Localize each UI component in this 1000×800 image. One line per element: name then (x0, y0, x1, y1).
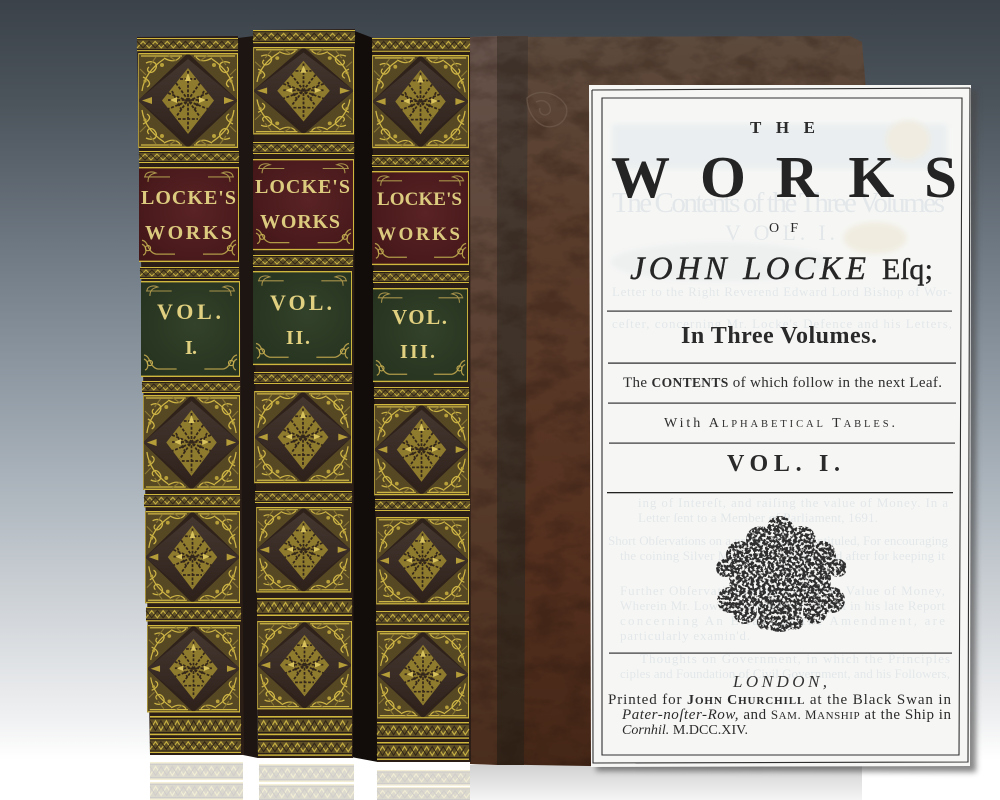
rule (608, 362, 956, 364)
text: In Three Volumes: In Three Volumes. (681, 323, 877, 349)
spine shadows between volumes (238, 30, 378, 762)
upper ornamental panel (138, 53, 238, 148)
green volume label: II. (286, 327, 310, 349)
volume three back cover (470, 36, 866, 766)
page: show-through text from reverse: Thoughts on Government, in which the Principles (640, 651, 950, 666)
page: paper (589, 85, 971, 767)
page: show-through text from reverse: Further Obſervations concerning the Value of Money, (620, 583, 945, 598)
green volume label: VOL. (392, 305, 447, 329)
text: London: LONDON, (732, 672, 827, 691)
cover: dark groove (497, 36, 528, 765)
red title label (372, 171, 469, 265)
text: VOL. I.: VOL. I. (727, 451, 840, 477)
bottom bands (377, 722, 469, 739)
green volume label (373, 288, 468, 382)
text: imprint: Cornhil. M.DCC.XIV. (622, 723, 748, 738)
cover: spine hinge (470, 36, 500, 765)
page: show-through text from reverse: The Contents of the Three Volumes (612, 187, 945, 219)
rule (607, 492, 953, 493)
text: alphabetical tables: With A LPHABETICAL T ABLES. (664, 416, 895, 431)
page: show-through text from reverse: Wherein Mr. Lowndes's Arguments for it in his late Report (620, 598, 945, 613)
text: imprint: Printed for JOHN CHURCHILL at the Black Swan in (608, 692, 952, 708)
green volume label: VOL. (270, 290, 332, 315)
lower ornamental panels (143, 395, 240, 490)
red title label: LOCKE'S (255, 176, 350, 198)
spine: volume three (372, 37, 471, 762)
page: show-through text from reverse: V O L. I. (725, 220, 835, 245)
page: show-through text from reverse: ciples and Foundation of Civil Government, and his Followers, (620, 666, 950, 681)
reflection of the books on the table (150, 762, 470, 800)
text: OF: OF (769, 221, 798, 236)
text: imprint: Pater-noſter-Row, and SAM. MANSHIP at the Ship in (621, 707, 952, 723)
page: shadow (596, 90, 977, 772)
page: show-through text from reverse: ing of Intereſt, and raiſing the value of Money. In a (638, 495, 948, 510)
cover: leather texture (470, 36, 866, 766)
page: show-through text from reverse: ceſter, concerning Mr. Locke's Defence and his Letters, (612, 316, 952, 331)
upper ornamental panel (372, 55, 469, 148)
rule (609, 652, 952, 654)
top band (137, 38, 238, 51)
green volume label: I. (185, 337, 197, 359)
red title label (253, 159, 354, 250)
heading: THE: THE (750, 118, 815, 137)
page: show-through text from reverse: concerning An Eſſay for the Amendment, are (620, 613, 945, 628)
page: show-through text from reverse: Letter ſent to a Member of Parliament, 1691. (638, 510, 878, 525)
spine: volume one (137, 36, 244, 755)
green volume label: VOL. (157, 299, 221, 324)
text: contents line: The CONTENTS of which follow in the next Leaf. (623, 375, 942, 391)
text: imprint (608, 692, 952, 738)
page: show-through text from reverse: the coining Silver Money in England, and after for keeping it (620, 548, 945, 563)
lower ornamental panels (254, 391, 352, 483)
rule (608, 402, 956, 404)
heading: John Locke Esq: Eſq; (882, 253, 933, 286)
red title label (139, 167, 239, 262)
page: show-through text from reverse: particularly examin'd. (620, 628, 750, 643)
printer's ornament (716, 516, 847, 632)
bottom bands (258, 716, 352, 735)
page: show-through text from reverse: Short Obſervations on a printed Paper, Entituled, For encouraging (608, 533, 948, 548)
cover: blind stamp (527, 92, 567, 127)
green volume label (253, 271, 352, 365)
page: show-through text from reverse: Letter to the Right Reverend Edward Lord Bishop of Wor- (612, 284, 952, 299)
strip (139, 151, 239, 163)
red title label: WORKS (260, 211, 340, 233)
red title label: LOCKE'S (377, 189, 462, 210)
red title label: WORKS (377, 224, 460, 245)
green volume label: III. (400, 341, 435, 363)
rule (609, 442, 955, 444)
heading: John Locke Esq: JOHN LOCKE (630, 251, 866, 287)
page: printed double border (592, 88, 970, 763)
shadow of cover on table (470, 765, 862, 800)
red title label: LOCKE'S (141, 187, 236, 209)
spine: volume two (253, 29, 355, 758)
green volume label (141, 281, 240, 377)
lower ornamental panels (374, 404, 469, 495)
upper ornamental panel (253, 47, 354, 134)
heading: WORKS: WORKS (611, 144, 957, 210)
page: show-through text from reverse (608, 187, 952, 681)
rule (607, 310, 952, 312)
page: foxing and show-through tint (610, 120, 947, 282)
bottom bands (150, 716, 241, 735)
red title label: WORKS (145, 222, 232, 244)
title page (589, 85, 977, 772)
